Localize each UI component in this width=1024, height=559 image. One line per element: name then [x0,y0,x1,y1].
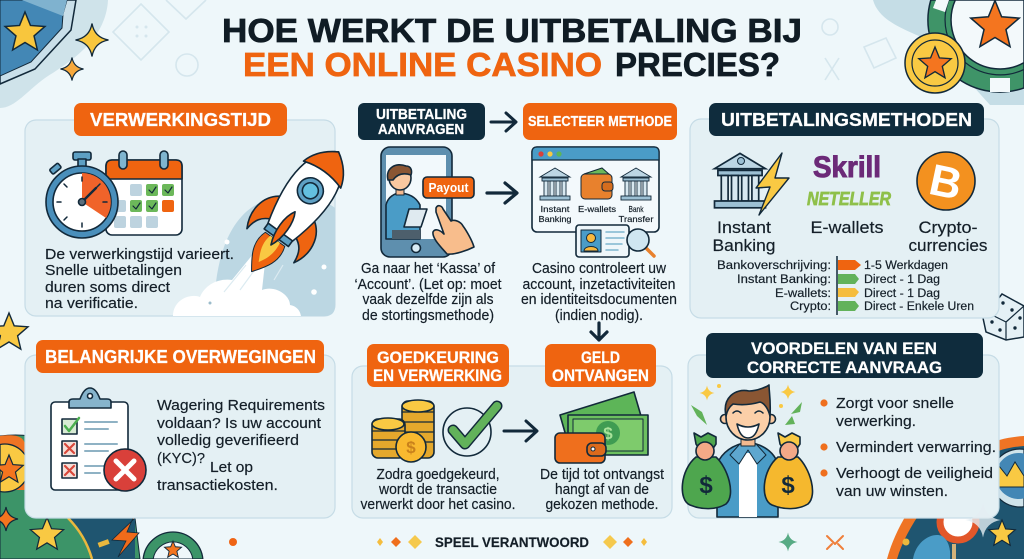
icon: bitcoin: B [925,155,966,210]
icon: browser window with methods: Bank [628,204,644,214]
heading: geld ontvangen: GELD [581,348,620,367]
list: voordelen: van uw winsten. [836,484,948,500]
chart: payout times: Direct - Enkele Uren [864,301,974,313]
icon: browser window with methods: E-wallets [578,204,616,214]
chart: payout times: Direct - 1 Dag [864,288,940,300]
logos: skrill and neteller: NETELLER [807,189,891,209]
icon: bitcoin [917,152,975,210]
chart: payout times: Crypto: [790,301,831,313]
icon: browser window with methods: Transfer [618,214,654,224]
heading: goedkeuring: GOEDKEURING [377,348,499,367]
pointing hand [433,206,474,254]
icon: rocket [224,132,366,292]
icon: browser window with methods [532,147,659,232]
panel: uitbetalingsmethoden [690,103,999,318]
text: verwerkingstijd [45,247,234,312]
labels: methods: Banking [712,237,776,255]
heading: VERWERKINGSTIJD [90,110,271,130]
icon: coins: $ [406,438,416,457]
text: overwegingen: voldaan? Is uw account [157,416,321,432]
rocket backdrop [214,196,335,316]
money bag green: $ [699,472,713,499]
text: controle: en identiteitsdocumenten [521,292,677,308]
heading: VOORDELEN VAN EEN [751,339,937,358]
chart: payout times [717,256,974,315]
watermark sparkle [966,502,1000,538]
arrow [504,421,537,441]
icon: browser window with methods: Instant [540,204,570,214]
heading: geld ontvangen: ONTVANGEN [552,366,649,385]
footer: speel verantwoord [377,535,647,550]
text: goedkeuring: verwerkt door het casino. [360,497,516,513]
heading: CORRECTE AANVRAAG [747,358,942,377]
heading [709,103,984,136]
icon: coins [372,400,434,462]
text: goedkeuring: wordt de transactie [378,482,497,498]
text: goedkeuring [360,467,516,513]
text: kassa: ‘Account’. (Let op: moet [354,277,502,293]
tablet [404,209,427,227]
heading: goedkeuring [367,344,509,387]
panel: voordelen [682,333,999,518]
decoration: green sparkle and orange x [778,532,843,552]
icon: id card and magnifier [576,225,654,257]
decoration: bottom-right roulette [887,436,1024,559]
chart: payout times: Bankoverschrijving: [717,260,831,272]
icon: bank with lightning [714,153,789,215]
text: ontvangst: De tijd tot ontvangst [540,467,664,483]
heading [706,333,983,378]
icon: clipboard [51,388,146,491]
heading: geld ontvangen [545,344,656,387]
heading [74,103,287,136]
decoration: dice right [983,294,1024,340]
panel: verwerkingstijd [25,103,366,316]
arrow [487,183,517,203]
list: voordelen: Vermindert verwarring. [836,440,996,456]
text: kassa [354,261,502,324]
icon: phone with payout button [381,147,474,257]
text: controle: Casino controleert uw [532,261,666,277]
text: overwegingen: Wagering Requirements [157,398,325,414]
text: verwerkingstijd: Snelle uitbetalingen [45,263,182,279]
step: uitbetaling aanvragen heading: UITBETALING [376,107,467,123]
list: voordelen: Zorgt voor snelle [836,396,954,412]
decoration: bottom-left chips and stars [0,313,237,559]
text: ontvangst: hangt af van de [555,482,649,498]
heading: goedkeuring: EN VERWERKING [373,366,502,385]
icon: stopwatch [46,152,118,238]
icons: sparkles and bills [691,384,802,425]
text: verwerkingstijd: na verificatie. [45,296,138,312]
text: kassa: de stortingsmethode) [362,308,494,324]
panel: belangrijke overwegingen [25,340,335,518]
text: kassa: Ga naar het ‘Kassa’ of [361,261,496,277]
labels: methods: Instant [717,219,771,237]
decoration: top-left shield with stars [0,0,108,108]
labels: methods: E-wallets [810,219,884,237]
title: EEN ONLINE CASINO [243,46,602,83]
heading: UITBETALINGSMETHODEN [721,110,972,130]
chart: payout times: E-wallets: [775,288,831,300]
footer: speel verantwoord: SPEEL VERANTWOORD [435,535,589,550]
step: selecteer methode heading [523,103,677,140]
chart: payout times: Direct - 1 Dag [864,274,940,286]
labels: methods: Crypto- [918,219,978,237]
icon: rocket smoke [173,240,326,316]
icon: calendar [106,151,182,235]
text: ontvangst [540,467,664,513]
chart: payout times: Instant Banking: [737,274,831,286]
text: ontvangst: gekozen methode. [546,497,658,513]
list: voordelen [820,396,996,500]
text: controle: (indien nodig). [555,308,643,324]
logos: skrill and neteller [807,151,891,209]
text: verwerkingstijd: duren soms direct [45,280,170,296]
money bag yellow: $ [781,472,795,499]
text: controle: account, inzetactiviteiten [522,277,676,293]
list: voordelen: verwerking. [836,414,916,430]
decoration: top-right chip and coin [873,0,1024,105]
logos: skrill and neteller: Skrill [813,151,881,184]
labels: methods [712,219,988,255]
arrow [591,323,607,340]
icon: money and wallet: $ [603,424,613,443]
icon: happy man with money bags [682,385,813,517]
icon: check circle [443,406,497,456]
title: HOE WERKT DE UITBETALING BIJ [222,12,802,49]
text: kassa: vaak dezelfde zijn als [362,292,494,308]
step: uitbetaling aanvragen heading: AANVRAGEN [378,122,464,138]
decoration: faint casino shapes [113,0,896,80]
text: goedkeuring: Zodra goedgekeurd, [376,467,500,483]
heading: BELANGRIJKE OVERWEGINGEN [45,347,316,367]
arrow [491,113,516,131]
text: verwerkingstijd: De verwerkingstijd varieert. [45,247,234,263]
icon: money and wallet [555,392,648,463]
icon: wallet [581,168,613,199]
text: controle [521,261,677,324]
text: overwegingen [157,398,325,494]
list: voordelen: Verhoogt de veiligheid [836,466,993,482]
labels: methods: currencies [908,237,988,255]
icon: browser window with methods: Banking [538,214,572,224]
title [222,12,802,83]
payout button: Payout [428,181,469,195]
title: PRECIES? [615,46,780,83]
step: uitbetaling aanvragen heading [358,103,485,140]
step: selecteer methode heading: SELECTEER METHODE [528,114,672,130]
heading [36,340,324,373]
text: overwegingen: transactiekosten. [157,478,278,494]
text: overwegingen: volledig geverifieerd [157,433,299,449]
chart: payout times: 1-5 Werkdagen [864,260,948,272]
text: overwegingen: (KYC)? [157,451,205,467]
person [386,165,420,239]
text: overwegingen: Let op [210,460,253,476]
panel: goedkeuring en ontvangst [352,344,672,518]
